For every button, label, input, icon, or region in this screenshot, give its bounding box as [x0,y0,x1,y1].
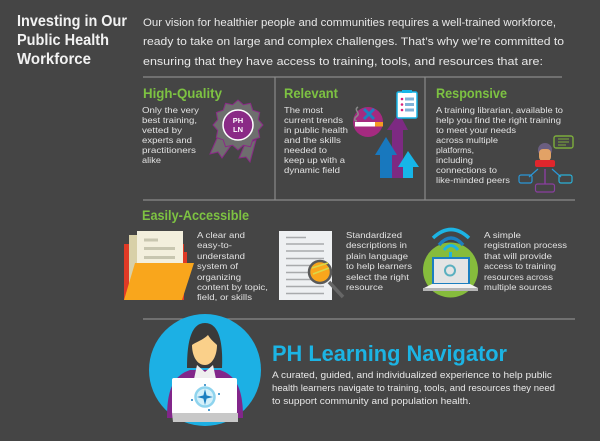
intro text: Our vision for healthier people and communities requires a well-trained workforce, [143,17,556,29]
text: standardized descriptions: resource [346,282,383,292]
text: registration description: that will provide [484,251,552,261]
text: standardized descriptions: to help learners [346,261,412,271]
heading: easily-accessible: Easily-Accessible [142,207,249,223]
heading: high-quality: High-Quality [143,85,222,101]
icon: PHLN ribbon badge: LN [233,125,243,134]
icon: PHLN ribbon badge [210,100,263,162]
text: high-quality description: experts and [142,135,192,145]
intro text [143,17,564,68]
text: high-quality description: best training, [142,115,197,125]
text: responsive description: connections to [436,165,497,175]
text: organizing description: system of [197,261,239,271]
text: registration description: access to training [484,261,556,271]
title [17,13,127,68]
icon: upward arrows [375,113,419,178]
text: standardized descriptions [346,230,412,292]
text: high-quality description: alike [142,155,161,165]
text: standardized descriptions: descriptions in [346,240,407,250]
title: Public Health [17,32,109,49]
text: standardized descriptions: plain language [346,251,408,261]
panel: high-quality [142,85,263,165]
panel: PH Learning Navigator [149,314,555,426]
text: standardized descriptions: select the right [346,272,410,282]
text: registration description: resources across [484,272,553,282]
icon: librarian network [519,136,573,192]
title: Investing in Our [17,13,127,30]
text: organizing description: A clear and [197,230,245,240]
panel: easily-accessible [124,207,567,302]
text: high-quality description: vetted by [142,125,183,135]
text: relevant description: in public health [284,125,348,135]
text: organizing description: easy-to- [197,240,232,250]
icon: laptop with wifi [423,230,478,298]
text: relevant description: keep up with a [284,155,345,165]
text: relevant description: The most [284,105,324,115]
text: relevant description: current trends [284,115,343,125]
icon: checklist [397,90,417,118]
text: relevant description: dynamic field [284,165,340,175]
text: registration description [484,230,567,292]
text: navigator description: to support community and population health. [272,396,471,407]
icon: document with magnifier [279,231,343,300]
text: standardized descriptions: Standardized [346,230,402,240]
text: responsive description [436,105,563,185]
heading: PH Learning Navigator: PH Learning Navigator [272,341,507,366]
text: responsive description: including [436,155,473,165]
icon: folder [124,231,194,300]
text: registration description: A simple [484,230,521,240]
text: relevant description: and the skills [284,135,341,145]
text: navigator description: A curated, guided, and individualized experience to help public [272,370,552,381]
intro text: ready to take on large and complex challenges. That’s why we’re committed to [143,36,564,48]
text: registration description: multiple sources [484,282,552,292]
text: responsive description: to meet your needs [436,125,516,135]
icon: woman with laptop [149,314,261,426]
text: responsive description: help you find the right training [436,115,561,125]
text: registration description: registration process [484,240,567,250]
panel: responsive [436,85,573,192]
icon: no smoking [353,107,383,137]
text: high-quality description: Only the very [142,105,200,115]
text: responsive description: platforms, [436,145,474,155]
heading: relevant: Relevant [284,85,338,101]
text: high-quality description: practitioners [142,145,196,155]
intro text: ensuring that they have access to training, tools, and resources that are: [143,56,543,68]
text: navigator description: health learners navigate to training, tools, and resources they need [272,383,555,394]
panel: relevant [284,85,419,178]
text: responsive description: A training librarian, available to [436,105,563,115]
text: organizing description: understand [197,251,245,261]
title: Workforce [17,51,91,68]
text: navigator description [272,370,555,407]
text: organizing description [197,230,268,302]
text: relevant description [284,105,348,175]
heading: responsive: Responsive [436,85,507,101]
text: organizing description: organizing [197,272,241,282]
text: organizing description: content by topic, [197,282,268,292]
text: responsive description: across multiple [436,135,498,145]
text: organizing description: field, or skills [197,292,252,302]
text: relevant description: needed to [284,145,327,155]
icon: PHLN ribbon badge: PH [233,116,243,125]
text: high-quality description [142,105,200,165]
text: responsive description: like-minded peers [436,175,510,185]
